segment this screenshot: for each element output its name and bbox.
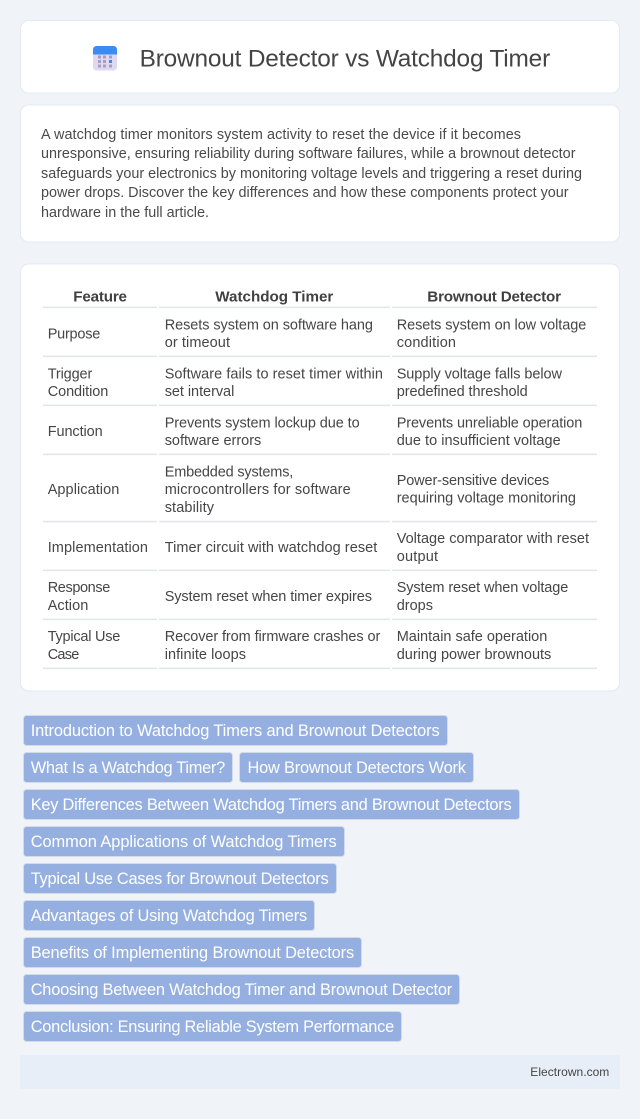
footer source: Electrown.com (530, 1065, 609, 1079)
tag: how brownout detectors work: How Brownout Detectors Work (248, 759, 467, 777)
row: typical use case: Maintain safe operation (397, 629, 547, 645)
tag: key differences (24, 790, 520, 820)
row: typical use case: during power brownouts (397, 647, 551, 663)
row: implementation: output (397, 549, 438, 565)
row: purpose: or timeout (165, 335, 230, 351)
row: typical use case: infinite loops (165, 647, 246, 663)
tag: conclusion (24, 1012, 402, 1042)
footer bar (20, 1055, 620, 1089)
row: trigger condition: Condition (48, 384, 108, 400)
row: application: Embedded systems, (165, 464, 293, 480)
intro paragraph: safeguards your electronics by monitoring voltage levels and triggering a reset during (41, 166, 582, 182)
tag: advantages: Advantages of Using Watchdog Timers (31, 907, 307, 925)
tag: typical use cases (24, 864, 336, 894)
row: response action: Action (48, 598, 88, 614)
table header row: Watchdog Timer (215, 289, 333, 306)
tag: introduction: Introduction to Watchdog Timers and Brownout Detectors (31, 722, 440, 740)
row: purpose: Resets system on low voltage (397, 317, 586, 333)
tag: choosing between: Choosing Between Watchdog Timer and Brownout Detector (31, 981, 453, 999)
row: trigger condition (48, 366, 563, 400)
row: application: requiring voltage monitoring (397, 491, 576, 507)
row: trigger condition: Supply voltage falls below (397, 366, 563, 382)
icon: calendar grid (93, 46, 117, 70)
row: application: stability (165, 500, 215, 516)
row: function: Prevents system lockup due to (165, 415, 360, 431)
section tags (24, 716, 520, 1042)
row: implementation (48, 531, 589, 565)
tag: how brownout detectors work (240, 752, 474, 782)
row: response action: System reset when timer expires (165, 589, 372, 605)
tag: common applications (24, 826, 344, 856)
intro paragraph: power drops. Discover the key differences and how these components protect your (41, 185, 569, 201)
tag: benefits (24, 938, 362, 968)
title: Brownout Detector vs Watchdog Timer (140, 46, 550, 73)
row: purpose: Purpose (48, 326, 100, 342)
tag: key differences: Key Differences Between Watchdog Timers and Brownout Detectors (31, 796, 512, 814)
tag: benefits: Benefits of Implementing Brownout Detectors (31, 944, 354, 962)
row: typical use case: Case (48, 647, 79, 663)
row: response action: Response (48, 580, 110, 596)
row: application: Power-sensitive devices (397, 473, 549, 489)
intro paragraph: A watchdog timer monitors system activity to reset the device if it becomes (41, 127, 521, 143)
tag: common applications: Common Applications of Watchdog Timers (31, 833, 337, 851)
row: implementation: Implementation (48, 540, 148, 556)
row: application (48, 464, 576, 516)
tag: typical use cases: Typical Use Cases for Brownout Detectors (31, 870, 329, 888)
row: trigger condition: Software fails to reset timer within (165, 366, 383, 382)
comparison table panel (20, 264, 620, 691)
row: function: Function (48, 424, 103, 440)
tag: advantages (24, 900, 314, 930)
tag: what is a watchdog timer: What Is a Watchdog Timer? (31, 759, 225, 777)
table header row: Brownout Detector (427, 289, 561, 306)
tag: what is a watchdog timer (24, 752, 232, 782)
row: implementation: Timer circuit with watchdog reset (165, 540, 377, 556)
intro text panel (20, 105, 620, 242)
row: implementation: Voltage comparator with reset (397, 531, 589, 547)
row: function: due to insufficient voltage (397, 433, 561, 449)
row: typical use case (48, 629, 551, 663)
row: application: Application (48, 482, 119, 498)
row: function (48, 415, 582, 449)
row: trigger condition: predefined threshold (397, 384, 528, 400)
row: trigger condition: set interval (165, 384, 234, 400)
row: function: Prevents unreliable operation (397, 415, 582, 431)
row: typical use case: Recover from firmware crashes or (165, 629, 380, 645)
tag: choosing between (24, 974, 460, 1004)
row: response action (48, 580, 568, 614)
tag: introduction (24, 716, 448, 746)
row: application: microcontrollers for software (165, 482, 351, 498)
row: purpose: Resets system on software hang (165, 317, 373, 333)
row: trigger condition: Trigger (48, 366, 92, 382)
row: response action: System reset when voltage (397, 580, 568, 596)
row: function: software errors (165, 433, 261, 449)
tag: conclusion: Conclusion: Ensuring Reliable System Performance (31, 1018, 394, 1036)
intro paragraph (41, 127, 582, 221)
table header row: Feature (73, 289, 127, 306)
header panel (20, 20, 620, 93)
row: typical use case: Typical Use (48, 629, 120, 645)
row: response action: drops (397, 598, 433, 614)
intro paragraph: hardware in the full article. (41, 205, 209, 221)
row: purpose (48, 317, 586, 351)
intro paragraph: unresponsive, ensuring reliability during software failures, while a brownout detector (41, 146, 576, 162)
row: purpose: condition (397, 335, 456, 351)
table header row (73, 289, 561, 306)
